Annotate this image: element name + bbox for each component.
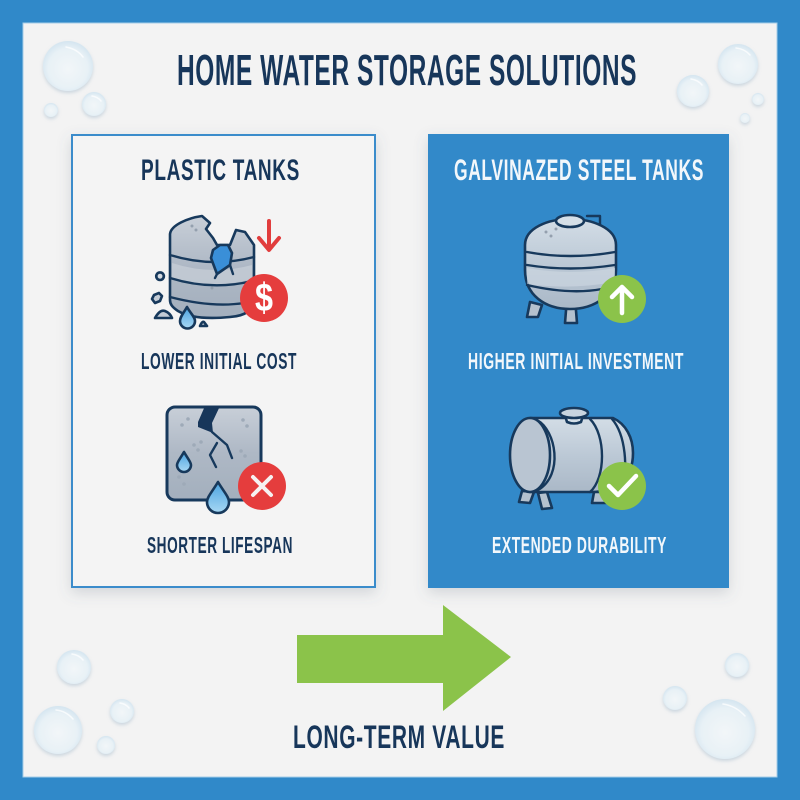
icon: cracked plastic tank with falling cost xyxy=(152,216,288,329)
label: long-term value: LONG-TERM VALUE xyxy=(293,719,505,755)
droplet highlights xyxy=(56,47,750,719)
icon: vertical steel tank with up arrow xyxy=(525,215,646,323)
arrow: long-term value xyxy=(297,605,511,711)
label: shorter lifespan: SHORTER LIFESPAN xyxy=(147,532,293,558)
heading: plastic tanks: PLASTIC TANKS xyxy=(141,154,300,187)
label: extended durability: EXTENDED DURABILITY xyxy=(492,532,667,558)
panel background xyxy=(72,135,375,587)
label: lower initial cost: LOWER INITIAL COST xyxy=(141,348,297,374)
icon: cracked plastic tank with falling cost: $ xyxy=(255,276,273,320)
panel background xyxy=(428,134,729,588)
panel: galvanized steel tanks xyxy=(428,134,729,588)
panel: plastic tanks xyxy=(72,135,375,587)
icon: cracked panel with leak xyxy=(167,406,286,513)
icon: horizontal steel tank with check xyxy=(510,408,646,510)
